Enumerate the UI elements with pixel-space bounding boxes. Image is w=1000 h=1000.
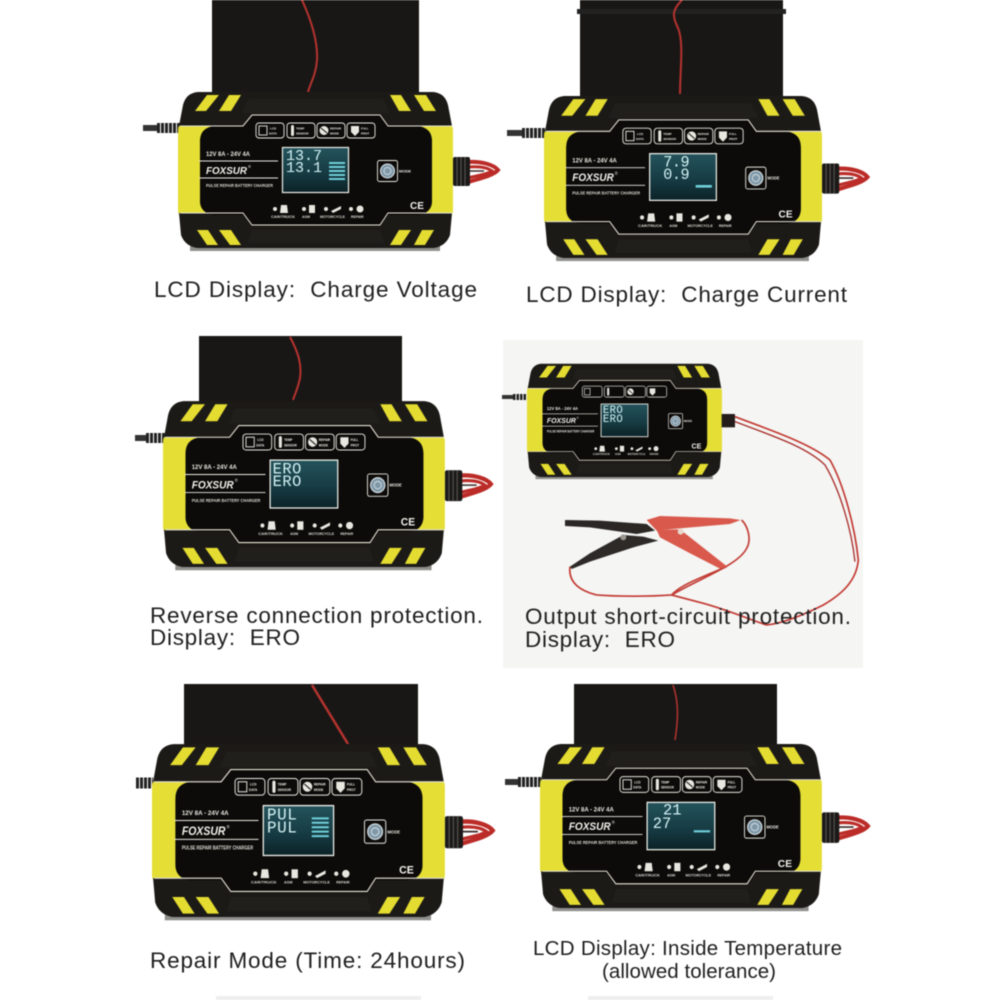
charger 6: inside temperature: REPAIR <box>717 873 731 877</box>
charger 6: inside temperature: LCD <box>634 780 641 784</box>
charger 4 body <box>527 364 722 479</box>
charger 5: repair mode: MODE <box>387 829 400 834</box>
charger 1: charge voltage: REPAIR <box>351 215 364 219</box>
charger 1: charge voltage: REPAIR <box>330 126 342 130</box>
charger 1: charge voltage: 13.7 <box>286 148 322 165</box>
charger 5: repair mode: SENSOR <box>278 788 292 792</box>
caption: reverse connection protection: Reverse connection protection. <box>150 603 483 628</box>
battery behind charger 5 <box>184 684 418 745</box>
charger 3: reverse connection <box>163 401 491 570</box>
caption: reverse connection protection <box>150 603 483 650</box>
charger 5: repair mode: REPAIR <box>314 783 326 787</box>
charger 1: charge voltage: 12V 8A - 24V 4A <box>206 152 251 158</box>
charger 3: reverse connection: AGM <box>290 532 298 536</box>
cropped text remnants at bottom edge <box>216 996 773 1000</box>
charger 6: inside temperature: PROT <box>728 786 736 790</box>
charger 5: repair mode: DATA <box>249 788 258 792</box>
charger 3: reverse connection: FULL <box>351 438 358 442</box>
charger 3: reverse connection: CAR/TRUCK <box>258 532 283 536</box>
battery behind charger 3 <box>199 336 402 402</box>
charger 5: repair mode: FULL <box>347 783 355 787</box>
charger 2: charge current: TEMP <box>663 132 672 136</box>
charger 4 body: MODE <box>684 419 692 423</box>
charger 3: reverse connection: DATA <box>256 443 265 447</box>
left cable 5 <box>136 778 153 788</box>
charger 6: inside temperature: 27 <box>653 815 671 833</box>
charger 5: repair mode: LCD <box>250 783 257 787</box>
charger 6: inside temperature: REPAIR <box>696 780 708 784</box>
charger 6: inside temperature <box>540 744 868 911</box>
charger 2: charge current: MODE <box>767 176 780 181</box>
charger 3: reverse connection: ERO <box>273 473 301 491</box>
charger 4 body: CE <box>691 443 702 451</box>
charger 5: repair mode: TEMP <box>278 783 287 787</box>
charger 6: inside temperature: MODE <box>696 786 705 790</box>
charger 2: charge current <box>544 96 868 261</box>
caption: inside temperature <box>533 937 842 983</box>
charger 4 body: 12V 8A - 24V 4A <box>547 406 578 411</box>
caption: inside temperature: LCD Display: Inside Temperature <box>533 937 842 960</box>
caption: reverse connection protection: Display: ERO <box>150 625 300 650</box>
charger 1: charge voltage: FULL <box>361 126 369 130</box>
charger 3: reverse connection: ® <box>235 478 238 483</box>
charger 6: inside temperature: CAR/TRUCK <box>635 873 660 877</box>
charger 6: inside temperature: ® <box>612 820 615 825</box>
charger 3: reverse connection: TEMP <box>284 438 292 442</box>
charger 4 body: ® <box>577 416 580 420</box>
charger 2: charge current: CAR/TRUCK <box>638 224 663 228</box>
red cable and crocodile clamps <box>565 414 858 625</box>
charger 3: reverse connection: FOXSUR <box>192 479 234 491</box>
charger 6: inside temperature: TEMP <box>661 780 669 784</box>
charger 3: reverse connection: SENSOR <box>284 443 298 447</box>
caption: inside temperature: (allowed tolerance) <box>602 960 776 983</box>
charger 2: charge current: SENSOR <box>663 137 677 141</box>
charger 6: inside temperature: AGM <box>667 873 675 877</box>
charger 5: repair mode: REPAIR <box>336 881 350 885</box>
charger 1: charge voltage: MODE <box>399 168 411 174</box>
charger 4 body: REPAIR <box>650 453 659 456</box>
charger 4 body: FOXSUR <box>547 416 576 425</box>
charger 5: repair mode: PUL <box>267 805 297 825</box>
charger 6: inside temperature: PULSE REPAIR BATTERY CHARGER <box>569 840 638 846</box>
charger 6: inside temperature: FULL <box>728 780 736 784</box>
charger 1: charge voltage: CAR/TRUCK <box>271 215 296 219</box>
charger 1: charge voltage: ® <box>248 164 251 169</box>
charger 1: charge voltage: PROT <box>361 132 370 136</box>
charger 1: charge voltage: CE <box>410 201 424 212</box>
charger 2: charge current: MODE <box>698 137 707 141</box>
charger 1: charge voltage: DATA <box>269 132 278 136</box>
charger 2: charge current: 7.9 <box>663 153 690 172</box>
charger 2: charge current: PROT <box>729 137 738 141</box>
caption: charge voltage: LCD Display: Charge Voltage <box>154 277 477 302</box>
charger 2: charge current: AGM <box>669 224 677 228</box>
charger 6: inside temperature: 21 <box>663 801 681 820</box>
charger 1: charge voltage: SENSOR <box>296 132 310 136</box>
charger 2: charge current: MOTORCYCLE <box>688 224 714 228</box>
charger 2: charge current: LCD <box>637 132 644 136</box>
charger 1: charge voltage: MODE <box>330 132 339 136</box>
charger 3: reverse connection: MODE <box>319 443 328 447</box>
charger 2: charge current: PULSE REPAIR BATTERY CHARGER <box>572 191 641 196</box>
charger 1: charge voltage <box>178 92 498 251</box>
charger 4 body: AGM <box>615 453 621 456</box>
charger 2: charge current: CE <box>779 209 793 221</box>
charger 1: charge voltage: PULSE REPAIR BATTERY CHARGER <box>206 183 274 188</box>
charger 2: charge current: FOXSUR <box>572 172 614 184</box>
battery behind charger 1 <box>212 0 419 93</box>
charger 5: repair mode: CAR/TRUCK <box>251 881 277 885</box>
battery behind charger 2 <box>577 0 786 97</box>
charger 6: inside temperature: 12V 8A - 24V 4A <box>569 806 614 813</box>
charger 2: charge current: REPAIR <box>698 132 710 136</box>
charger 2: charge current: DATA <box>636 137 645 141</box>
charger 4 body: PULSE REPAIR BATTERY CHARGER <box>547 430 595 434</box>
charger 4 body: MOTORCYCLE <box>628 453 646 456</box>
charger 1: charge voltage: 13.1 <box>286 160 322 177</box>
charger 4 body: ERO <box>603 405 623 417</box>
charger 3: reverse connection: PULSE REPAIR BATTERY CHARGER <box>192 498 261 504</box>
charger 6: inside temperature: CE <box>778 859 792 870</box>
charger 2: charge current: ® <box>615 171 618 176</box>
charger 4 body: CAR/TRUCK <box>593 453 610 456</box>
charger 3: reverse connection: REPAIR <box>319 438 331 442</box>
charger 6: inside temperature: SENSOR <box>661 786 675 790</box>
caption: repair mode: Repair Mode (Time: 24hours) <box>150 948 465 973</box>
charger 5: repair mode: PULSE REPAIR BATTERY CHARGER <box>182 845 253 851</box>
left cable 1 <box>143 125 180 131</box>
charger 5: repair mode: PROT <box>347 788 356 792</box>
charger 2: charge current: 12V 8A - 24V 4A <box>572 157 617 164</box>
charger 3: reverse connection: MOTORCYCLE <box>309 532 335 536</box>
left cable 2 <box>507 130 545 136</box>
charger 5: repair mode: 12V 8A - 24V 4A <box>182 810 229 817</box>
charger 1: charge voltage: FOXSUR <box>206 165 247 177</box>
charger 5: repair mode: AGM <box>284 881 292 885</box>
charger 2: charge current: FULL <box>729 132 737 136</box>
charger 3: reverse connection: MODE <box>390 483 402 488</box>
charger 1: charge voltage: AGM <box>302 215 310 219</box>
panel: output short-circuit photo background <box>503 340 863 668</box>
left cable 3 <box>135 435 165 441</box>
charger 6: inside temperature: FOXSUR <box>569 821 611 833</box>
charger 3: reverse connection: ERO <box>273 460 301 479</box>
charger 3: reverse connection: LCD <box>257 438 264 442</box>
charger 5: repair mode: FOXSUR <box>182 826 226 838</box>
charger 2: charge current: 0.9 <box>663 166 690 184</box>
charger 5: repair mode: ® <box>227 824 230 829</box>
charger 3: reverse connection: REPAIR <box>340 532 354 536</box>
charger 1: charge voltage: LCD <box>270 126 277 130</box>
charger 6: inside temperature: DATA <box>633 786 642 790</box>
charger 6: inside temperature: MODE <box>767 825 779 830</box>
charger 5: repair mode: MODE <box>314 788 324 792</box>
charger 5: repair mode: CE <box>399 865 414 877</box>
caption: charge current: LCD Display: Charge Current <box>526 282 848 307</box>
charger 5: repair mode: PUL <box>267 818 297 838</box>
charger 3: reverse connection: CE <box>401 517 415 529</box>
charger 3: reverse connection: 12V 8A - 24V 4A <box>192 464 237 471</box>
caption: output short-circuit protection <box>525 604 851 652</box>
caption: output short-circuit protection: Output short-circuit protection. <box>525 604 851 629</box>
charger 4 body: ERO <box>603 414 623 426</box>
charger 3: reverse connection: PROT <box>351 443 359 447</box>
charger 2: charge current: REPAIR <box>719 224 732 228</box>
battery behind charger 6 <box>574 684 777 745</box>
left cable 4 <box>502 395 529 399</box>
charger 1: charge voltage: MOTORCYCLE <box>320 215 346 219</box>
caption: output short-circuit protection: Display: ERO <box>525 627 675 652</box>
charger 5: repair mode: MOTORCYCLE <box>303 881 330 885</box>
charger 4: short-circuit with clamps <box>502 364 858 625</box>
charger 1: charge voltage: TEMP <box>296 126 304 130</box>
left cable 6 <box>505 779 541 785</box>
charger 5: repair mode <box>152 744 493 920</box>
charger 6: inside temperature: MOTORCYCLE <box>686 873 712 877</box>
